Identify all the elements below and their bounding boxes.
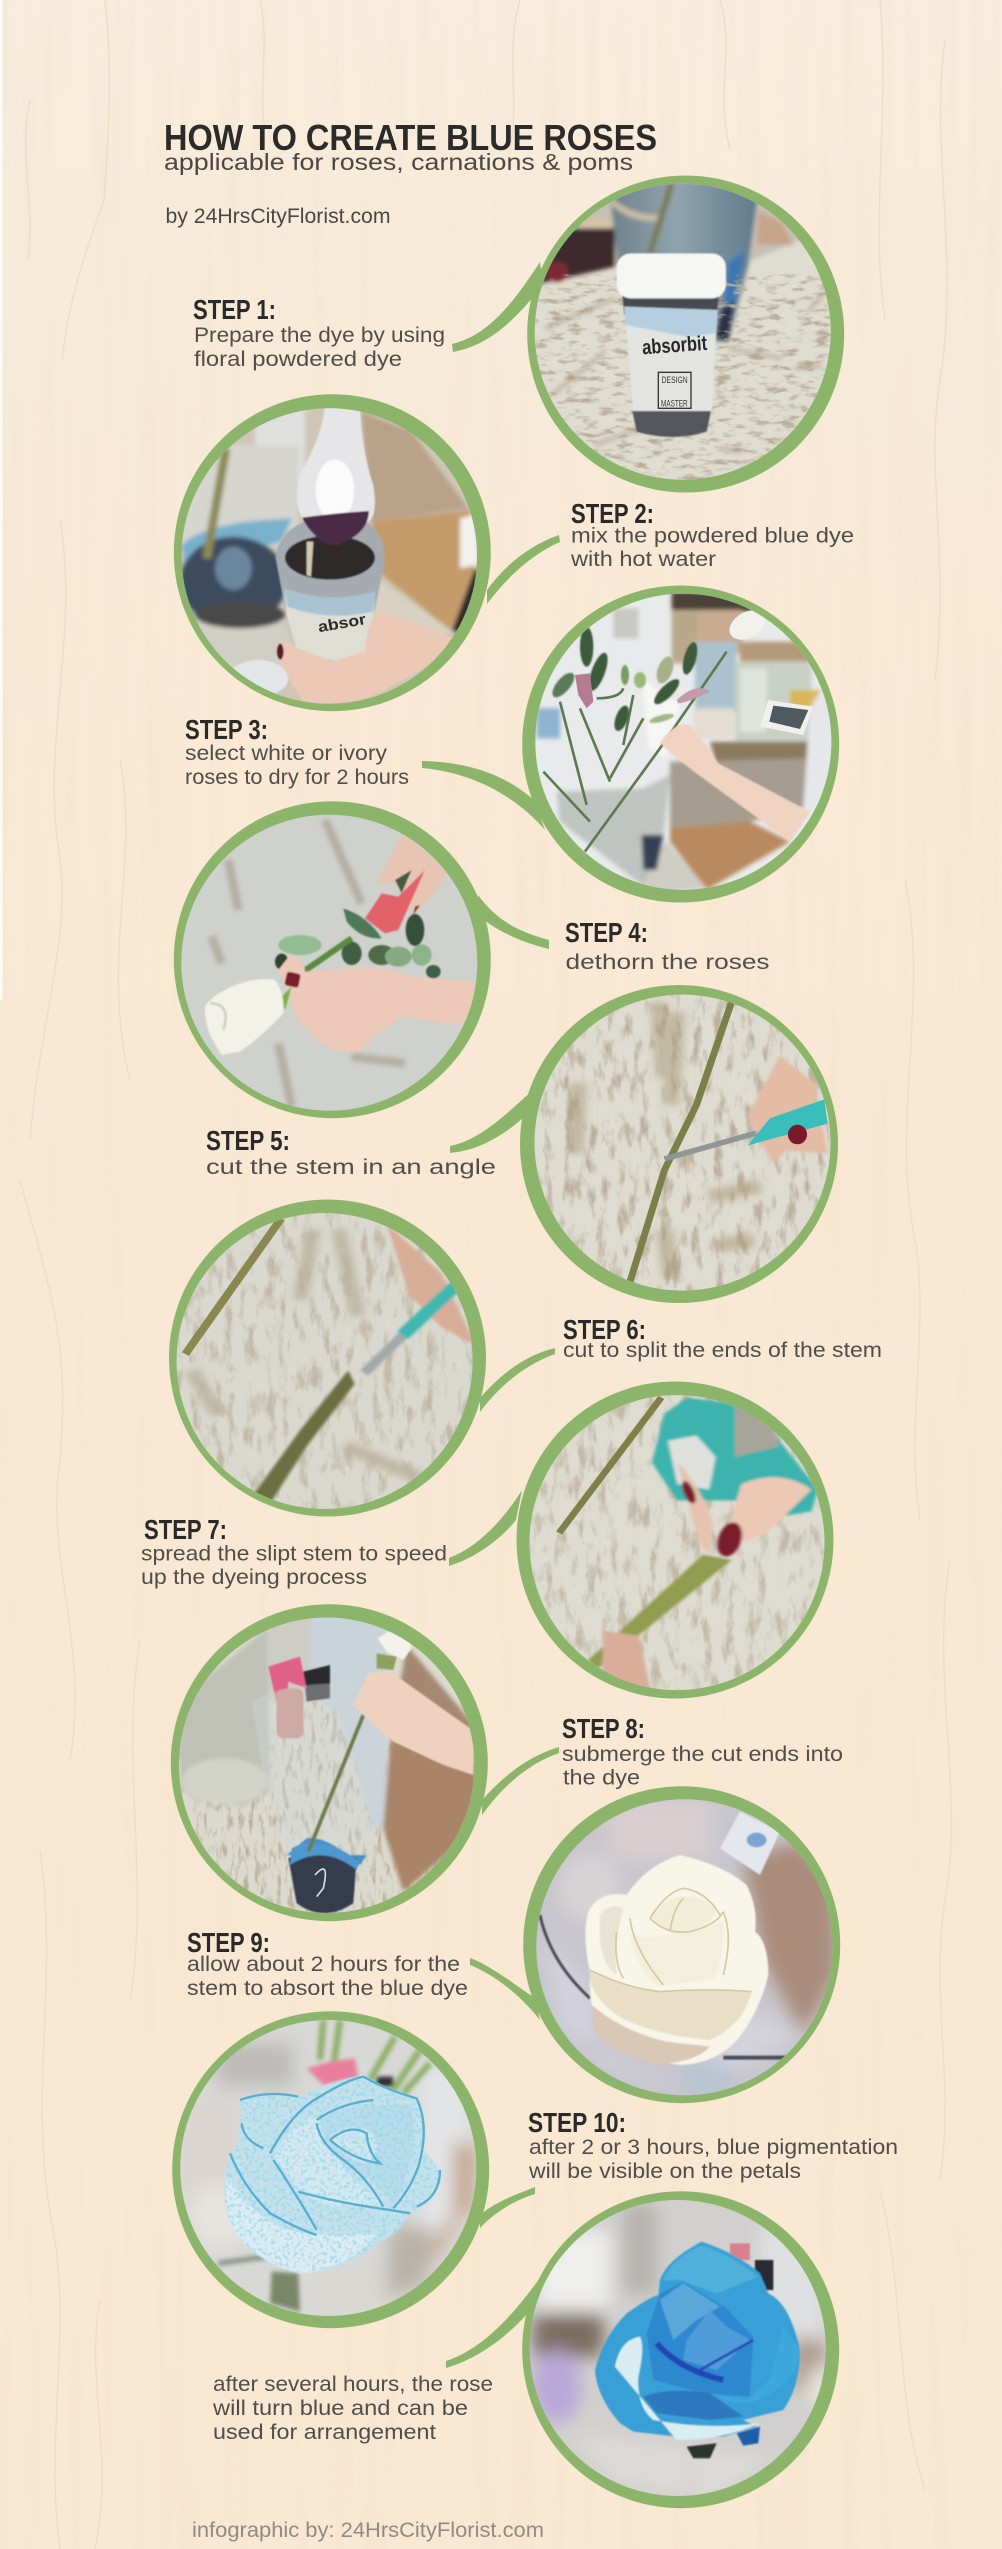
step 8 text: the dye (563, 1766, 640, 1790)
description: select white or ivory (185, 742, 388, 765)
panel: step 2 photo, pouring powder: absor (317, 611, 367, 636)
final text: will turn blue and can be (212, 2397, 468, 2420)
step 2 text: with hot water (570, 548, 716, 571)
main title: HOW TO CREATE BLUE ROSES (164, 117, 657, 158)
panel: step 8 photo, submerging in dye (170, 1604, 488, 1922)
step 9 text: stem to absort the blue dye (187, 1977, 468, 2000)
step 2 text (570, 498, 854, 571)
heading: STEP 4: (565, 917, 648, 948)
description: after 2 or 3 hours, blue pigmentation (529, 2136, 898, 2159)
step 3 text: roses to dry for 2 hours (185, 766, 409, 789)
description: spread the slipt stem to speed (141, 1542, 447, 1566)
step 5 text (206, 1125, 496, 1179)
description: submerge the cut ends into (562, 1743, 843, 1766)
panel: step 7 photo, spreading stem (511, 1381, 843, 1706)
title block (164, 117, 657, 228)
heading: STEP 9: (187, 1927, 270, 1958)
jar (617, 253, 726, 437)
heading: STEP 1: (193, 294, 276, 325)
panel: step 4 photo, dethorning (165, 790, 505, 1130)
heading: STEP 7: (144, 1514, 227, 1545)
panel: step 1 photo, dye jar: DESIGN (662, 375, 688, 385)
panel: step 6 photo, splitting stem (169, 1200, 486, 1516)
step 1 text: floral powdered dye (194, 348, 402, 371)
description: cut to split the ends of the stem (563, 1339, 882, 1362)
step 6 text (563, 1314, 882, 1362)
description: Prepare the dye by using (194, 324, 445, 347)
panel: step 3 photo, selecting roses (522, 586, 840, 902)
heading: STEP 6: (563, 1314, 646, 1345)
description: dethorn the roses (566, 951, 770, 974)
panel: final photo, blue rose (522, 2191, 840, 2508)
description: mix the powdered blue dye (571, 524, 854, 548)
heading: STEP 8: (562, 1713, 645, 1744)
panel: step 1 photo, dye jar: MASTER (661, 398, 688, 408)
step 7 text: up the dyeing process (141, 1566, 367, 1589)
connector tails (422, 262, 560, 2368)
panel: step 1 photo, dye jar: absorbit (641, 332, 708, 359)
panel: step 9 photo, white rose (523, 1786, 840, 2104)
footer credit: infographic by: 24HrsCityFlorist.com (192, 2519, 544, 2542)
byline: by 24HrsCityFlorist.com (166, 205, 390, 228)
heading: STEP 5: (206, 1125, 290, 1156)
step 4 text (565, 917, 770, 974)
panel: step 10 photo, pale blue rose (172, 2011, 490, 2328)
step 9 text (187, 1927, 468, 2000)
step 1 text (193, 294, 445, 371)
panel: step 2 photo, pouring powder (174, 394, 491, 712)
heading: STEP 10: (528, 2107, 626, 2138)
panel: step 1 photo, dye jar (527, 176, 844, 492)
final text (212, 2373, 493, 2444)
step 10 text: will be visible on the petals (528, 2160, 801, 2183)
description: allow about 2 hours for the (187, 1953, 460, 1976)
step 8 text (562, 1713, 843, 1790)
subtitle: applicable for roses, carnations & poms (164, 149, 633, 175)
step 3 text (185, 714, 409, 789)
final text: used for arrangement (213, 2421, 436, 2444)
step 10 text (528, 2107, 898, 2183)
panel: step 5 photo, cutting stem (511, 980, 843, 1305)
heading: STEP 2: (571, 498, 654, 529)
step 7 text (141, 1514, 447, 1589)
heading: STEP 3: (185, 714, 268, 745)
final text: after several hours, the rose (213, 2373, 493, 2396)
description: cut the stem in an angle (206, 1156, 496, 1179)
